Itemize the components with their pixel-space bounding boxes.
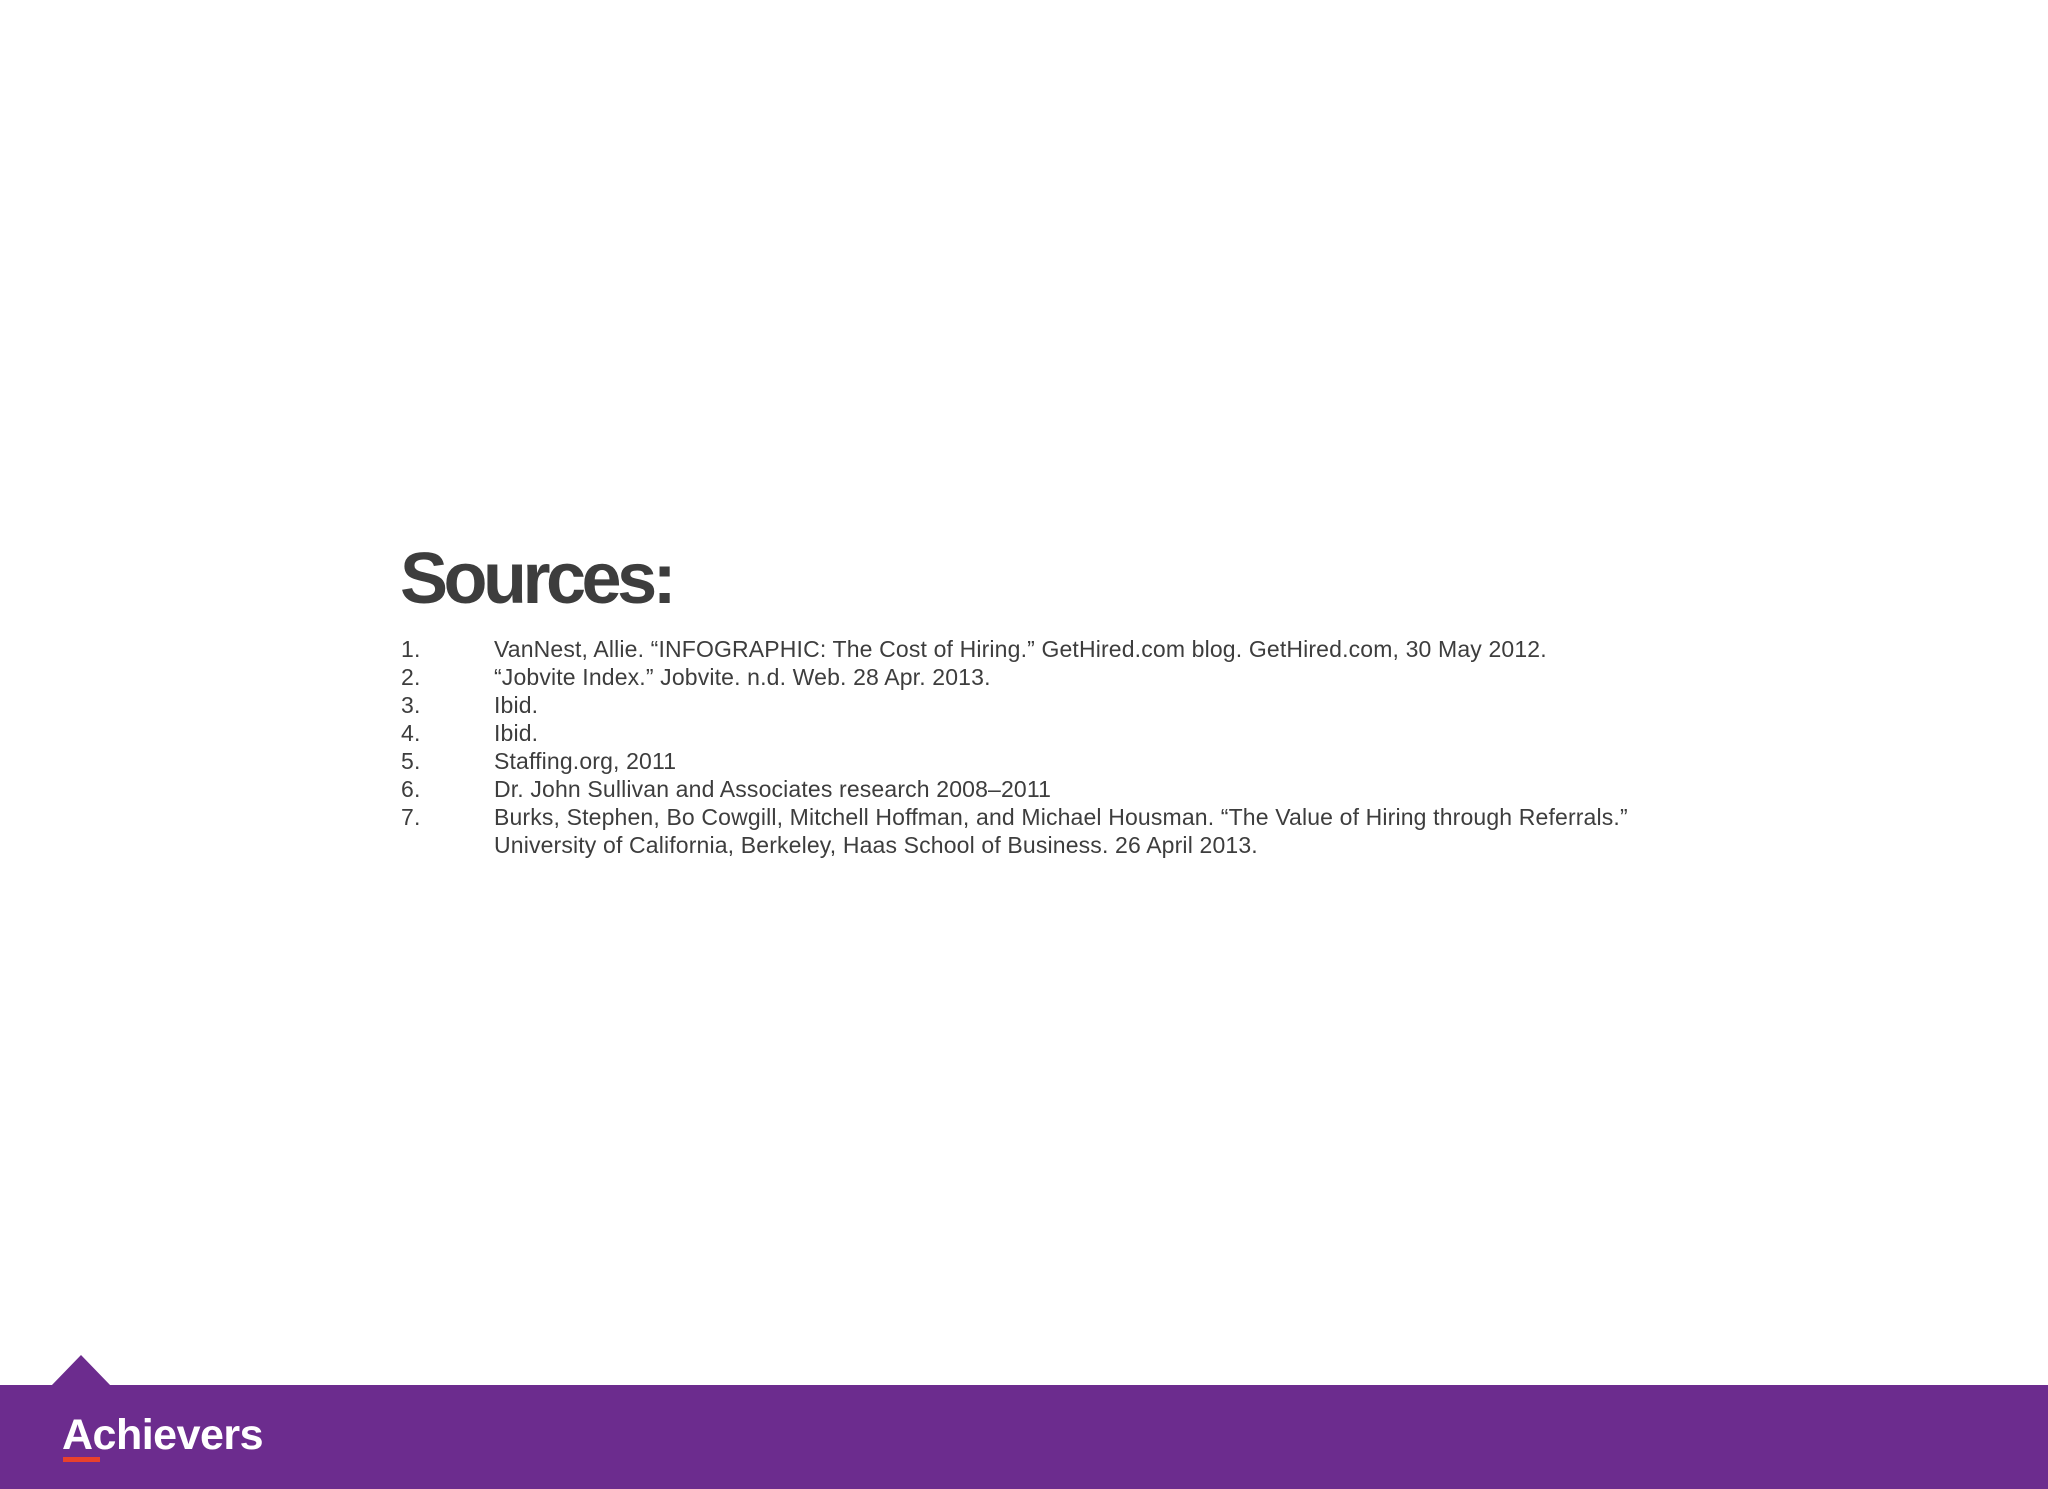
text: Ibid. — [494, 692, 538, 718]
text: VanNest, Allie. “INFOGRAPHIC: The Cost of Hiring.” GetHired.com blog. GetHired.com, 30 May 2012. — [494, 636, 1547, 662]
text: 5. — [401, 748, 420, 774]
text: 6. — [401, 776, 420, 802]
text: 1. — [401, 636, 420, 662]
text: Staffing.org, 2011 — [494, 748, 676, 774]
title: Sources: — [400, 539, 672, 619]
text: Burks, Stephen, Bo Cowgill, Mitchell Hoffman, and Michael Housman. “The Value of Hiring through Referrals.” — [494, 804, 1628, 830]
text: 4. — [401, 720, 420, 746]
sources list — [401, 636, 1628, 858]
text: University of California, Berkeley, Haas School of Business. 26 April 2013. — [494, 832, 1258, 858]
text: 3. — [401, 692, 420, 718]
footer bar — [0, 1385, 2048, 1489]
text: 2. — [401, 664, 420, 690]
logo: Achievers: Achievers — [62, 1411, 263, 1459]
footer tab triangle — [51, 1355, 111, 1386]
text: Ibid. — [494, 720, 538, 746]
text: 7. — [401, 804, 420, 830]
text: Dr. John Sullivan and Associates research 2008–2011 — [494, 776, 1051, 802]
text: “Jobvite Index.” Jobvite. n.d. Web. 28 Apr. 2013. — [494, 664, 991, 690]
